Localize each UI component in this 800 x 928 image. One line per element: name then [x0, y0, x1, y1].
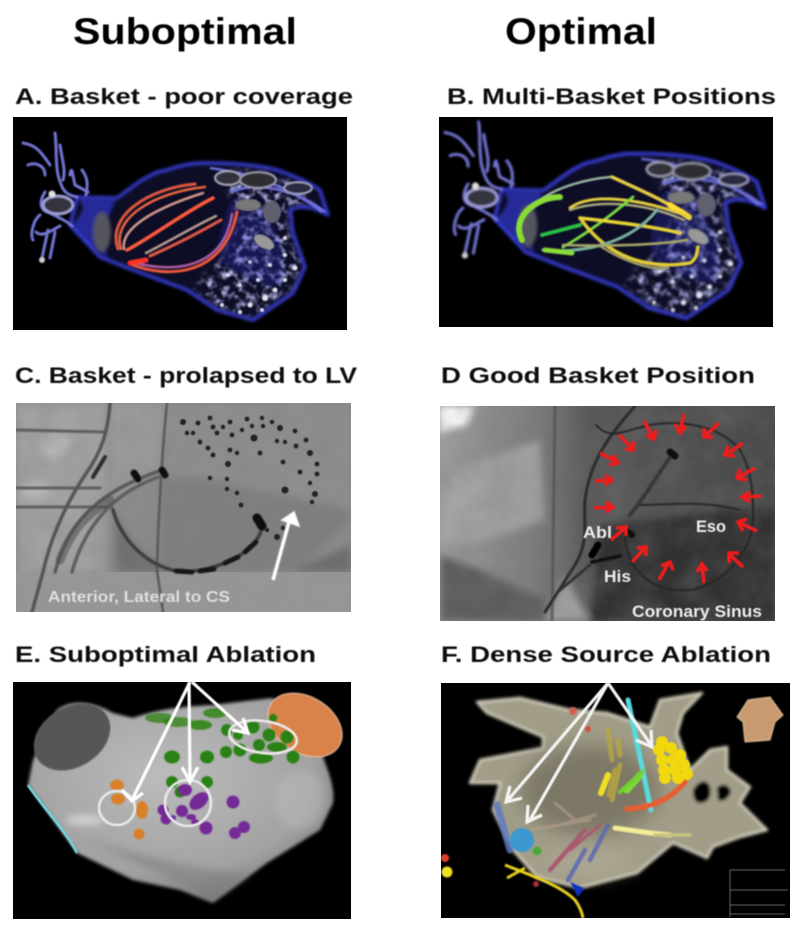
panel D: fluoroscopy good basket position	[440, 406, 775, 621]
red basket splines	[116, 184, 237, 272]
panel F: dense source ablation map	[441, 683, 790, 918]
caption: Anterior, Lateral to CS: Anterior, Lateral to CS	[48, 589, 230, 606]
label: Abl: Abl	[583, 523, 612, 542]
label: Eso: Eso	[696, 517, 726, 536]
panel A: basket poor coverage	[13, 117, 347, 330]
green lesions	[145, 708, 300, 798]
panel E: suboptimal ablation map	[13, 680, 354, 919]
orange lesions	[110, 780, 148, 840]
purple lesions	[158, 784, 250, 839]
heading: panel F: F. Dense Source Ablation	[441, 642, 771, 667]
coloured ablation lines	[497, 700, 690, 880]
tan atrium surface	[470, 693, 767, 888]
white arrows	[122, 682, 248, 801]
heading: panel E: E. Suboptimal Ablation	[15, 642, 316, 667]
panel B: multi-basket positions	[439, 117, 778, 327]
yellow lesion cluster	[653, 736, 693, 784]
side markers	[441, 707, 591, 887]
orange valve cap	[266, 692, 344, 758]
blue marker	[570, 882, 584, 897]
yellow catheter	[505, 865, 583, 918]
blue lesion cluster	[510, 828, 534, 852]
label: His: His	[604, 567, 631, 586]
green and yellow basket splines	[519, 177, 698, 268]
heading: panel A: A. Basket - poor coverage	[15, 84, 353, 109]
cyan edge	[28, 785, 77, 853]
label: Coronary Sinus: Coronary Sinus	[632, 602, 762, 621]
dark vein opening	[33, 704, 111, 772]
torso orientation thumbnail	[737, 697, 783, 742]
grey atrium surface	[28, 698, 337, 903]
red arrows around basket	[594, 414, 762, 583]
info table	[730, 870, 788, 917]
title: Optimal: Optimal	[505, 11, 657, 52]
white arrows	[506, 683, 652, 822]
heading: panel B: B. Multi-Basket Positions	[447, 84, 776, 109]
heading: panel C: C. Basket - prolapsed to LV	[15, 363, 357, 388]
panel C: fluoroscopy basket prolapsed to LV	[16, 403, 351, 612]
catheter and guide lines	[16, 403, 262, 612]
green marker	[532, 846, 542, 856]
white target circles	[99, 716, 299, 826]
catheters and basket outline	[545, 406, 753, 621]
basket electrode dots	[180, 416, 319, 540]
arrow: prolapse location	[273, 512, 299, 580]
title: Suboptimal: Suboptimal	[73, 11, 297, 52]
heading: panel D: D Good Basket Position	[441, 363, 755, 388]
